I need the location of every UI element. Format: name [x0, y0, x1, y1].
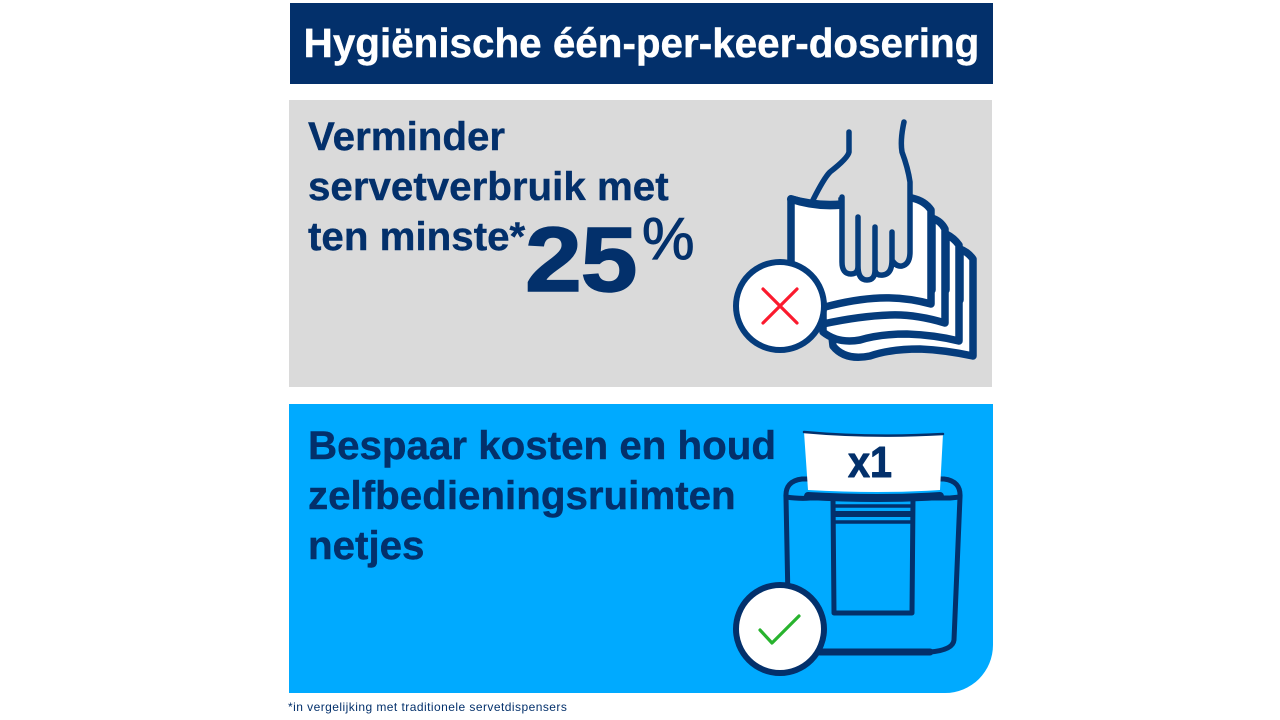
panel text: save costs: netjes	[308, 523, 424, 568]
napkin top edge	[804, 432, 943, 436]
panel text: save costs	[308, 423, 776, 568]
panel text: reduce napkin use	[308, 114, 669, 259]
statistic: 25 percent: 25	[525, 209, 636, 311]
title banner	[290, 3, 993, 84]
icon: green check badge	[736, 585, 824, 673]
panel text: reduce napkin use: Verminder	[308, 114, 505, 159]
hand	[791, 122, 910, 280]
title banner: Hygiënische één-per-keer-dosering	[304, 20, 979, 66]
icon: red cross badge	[736, 262, 824, 350]
dispensed napkin	[804, 432, 943, 492]
panel text: reduce napkin use: servetverbruik met	[308, 164, 669, 209]
dispenser body	[786, 479, 960, 652]
napkin layer 1	[791, 198, 931, 307]
napkin layer 2	[823, 218, 945, 324]
panel: reduce napkin use	[289, 100, 992, 387]
panel text: save costs: zelfbedieningsruimten	[308, 473, 736, 518]
napkin layer 3	[823, 234, 959, 341]
napkin layer 4	[830, 249, 973, 357]
x1 label: x1	[848, 438, 892, 487]
icon: napkin dispenser x1	[786, 432, 960, 652]
panel: save costs	[289, 404, 993, 693]
statistic: 25 percent	[525, 206, 694, 311]
statistic: 25 percent: %	[642, 206, 694, 272]
panel text: save costs: Bespaar kosten en houd	[308, 423, 776, 468]
footnote: *in vergelijking met traditionele servetdispensers	[288, 700, 567, 714]
panel text: reduce napkin use: ten minste*	[308, 214, 525, 259]
